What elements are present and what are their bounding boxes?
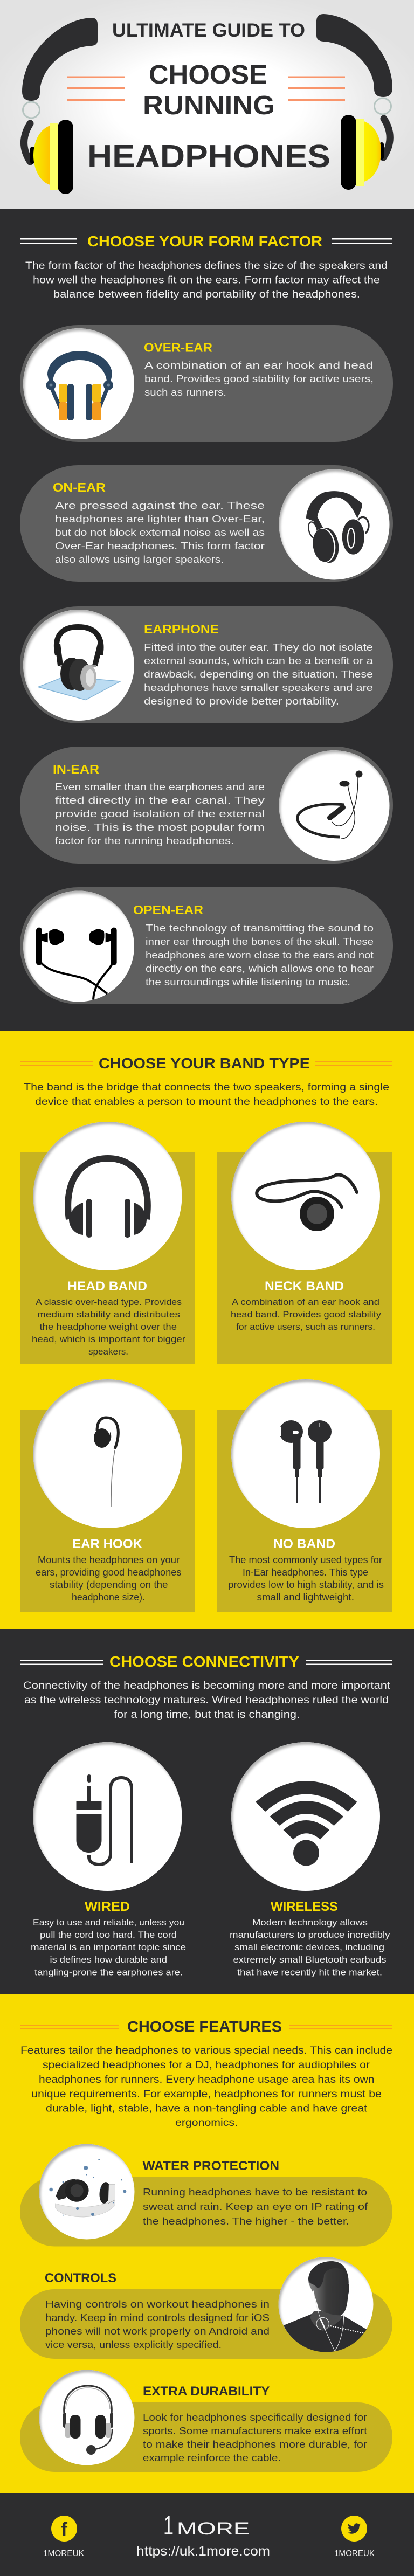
card: ear hook <box>20 1379 195 1612</box>
intro text: band type: device that enables a person to mount the headphones to the ears. <box>35 1096 378 1108</box>
description: in-ear: factor for the running headphones. <box>55 835 234 846</box>
description: water protection: Running headphones have to be resistant to <box>143 2186 367 2198</box>
heading: choose features: CHOOSE FEATURES <box>127 2018 282 2035</box>
label: over-ear: OVER-EAR <box>144 341 212 355</box>
description: on-ear: Are pressed against the ear. These <box>55 500 265 511</box>
description: in-ear <box>55 782 265 846</box>
description: controls: Having controls on workout headphones in <box>45 2298 270 2310</box>
description: open-ear: the surroundings while listening to music. <box>146 977 350 987</box>
facebook handle: 1MOREUK <box>43 2549 84 2558</box>
card: head band <box>20 1122 195 1364</box>
card: wireless <box>230 1742 390 1977</box>
description: extra durability: to make their headphones more durable, for <box>143 2439 367 2450</box>
description: no band: small and lightweight. <box>257 1592 354 1603</box>
heading: choose connectivity: CHOOSE CONNECTIVITY <box>109 1653 299 1670</box>
description: over-ear: A combination of an ear hook and head <box>144 360 373 371</box>
label: no band: NO BAND <box>273 1537 335 1551</box>
description: open-ear <box>146 923 374 987</box>
card: water protection <box>20 2144 392 2247</box>
label: open-ear: OPEN-EAR <box>133 903 203 917</box>
icon: headphones illustration left side <box>22 18 98 194</box>
description: wired: tangling-prone the earphones are. <box>34 1967 183 1977</box>
label: wired: WIRED <box>85 1900 130 1914</box>
intro text: form factor: The form factor of the headphones defines the size of the speakers and <box>25 260 388 272</box>
intro text: form factor <box>25 260 388 300</box>
label: in-ear: IN-EAR <box>53 762 99 776</box>
intro text: connectivity <box>23 1680 391 1721</box>
description: no band <box>228 1555 384 1603</box>
description: earphone: Fitted into the outer ear. They do not isolate <box>144 642 373 653</box>
panel: connectivity section <box>0 1629 414 1994</box>
intro text: features <box>20 2045 392 2129</box>
description: ear hook: ears, providing good headphones <box>36 1567 181 1578</box>
panel: form factor section <box>0 209 414 1031</box>
icon: no band earbuds <box>279 1420 332 1503</box>
description: earphone: headphones have smaller speakers and are <box>144 682 373 693</box>
icon: neck band headset <box>257 1175 357 1231</box>
description: no band: provides low to high stability, and is <box>228 1579 384 1590</box>
description: open-ear: headphones are worn close to the ears and not <box>146 950 374 961</box>
description: ear hook: Mounts the headphones on your <box>38 1555 180 1565</box>
description: water protection: the headphones. The higher - the better. <box>143 2215 349 2227</box>
description: on-ear: also allows using larger speakers. <box>55 554 224 565</box>
description: controls: vice versa, unless explicitly specified. <box>45 2339 222 2350</box>
description: over-ear: band. Provides good stability for active users, <box>144 374 374 384</box>
description: controls: phones will not work properly on Android and <box>45 2325 270 2337</box>
intro text: connectivity: as the wireless technology matures. Wired headphones ruled the world <box>24 1695 389 1706</box>
icon: facebook <box>51 2516 77 2542</box>
icon: twitter <box>341 2516 367 2542</box>
description: in-ear: provide good isolation of the external <box>55 809 265 819</box>
intro text: connectivity: Connectivity of the headphones is becoming more and more important <box>23 1680 391 1691</box>
card: in-ear <box>20 747 393 864</box>
description: wireless: manufacturers to produce incredibly <box>230 1930 390 1940</box>
label: water protection: WATER PROTECTION <box>142 2159 279 2173</box>
description: head band: head, which is important for bigger <box>32 1335 186 1344</box>
title <box>87 20 330 174</box>
logo: 1MORE: MORE <box>177 2519 250 2538</box>
description: no band: The most commonly used types for <box>229 1555 382 1565</box>
description: wired <box>31 1917 186 1977</box>
description: head band: medium stability and distributes <box>37 1310 180 1320</box>
description: over-ear: such as runners. <box>144 387 226 398</box>
description: ear hook: stability (depending on the <box>50 1579 168 1590</box>
description: over-ear <box>144 360 374 398</box>
card: neck band <box>217 1122 392 1364</box>
description: neck band: A combination of an ear hook and <box>232 1297 380 1307</box>
label: on-ear: ON-EAR <box>53 480 106 494</box>
description: head band: speakers. <box>88 1347 128 1357</box>
logo: 1MORE <box>163 2511 250 2540</box>
card: wired <box>31 1742 186 1977</box>
label: head band: HEAD BAND <box>67 1279 147 1294</box>
card: extra durability <box>20 2370 392 2472</box>
icon: over-ear headphones <box>46 351 113 420</box>
card: open-ear <box>20 887 393 1004</box>
description: head band <box>32 1297 186 1357</box>
description: controls: handy. Keep in mind controls designed for iOS <box>45 2312 270 2323</box>
decorative sound lines <box>67 77 345 101</box>
description: earphone: drawback, depending on the situation. These <box>144 669 373 680</box>
intro text: features: durable, light, stable, have a non-tangling cable and have great <box>46 2103 368 2114</box>
card: controls <box>20 2257 392 2359</box>
label: wireless: WIRELESS <box>271 1900 338 1914</box>
twitter handle: 1MOREUK <box>334 2549 375 2558</box>
description: ear hook: headphone size). <box>72 1592 145 1603</box>
logo: 1MORE: 1 <box>163 2511 174 2540</box>
card: no band <box>217 1379 392 1612</box>
description: earphone: external sounds, which can be a benefit or a <box>144 655 374 666</box>
footer <box>0 2493 414 2576</box>
heading: choose your form factor: CHOOSE YOUR FORM FACTOR <box>87 233 322 250</box>
icon: earphone with plate <box>38 627 120 700</box>
description: wireless: small electronic devices, including <box>234 1942 384 1952</box>
title: CHOOSE <box>149 60 267 89</box>
description: in-ear: noise. This is the most popular form <box>55 822 265 833</box>
label: neck band: NECK BAND <box>265 1279 344 1294</box>
description: on-ear: Over-Ear headphones. This form factor <box>55 541 265 551</box>
icon: audio jack <box>77 1774 132 1864</box>
description: extra durability <box>143 2412 367 2463</box>
description: wired: is defines how durable and <box>50 1955 167 1965</box>
description: no band: In-Ear headphones. This type <box>243 1567 368 1578</box>
description: wireless: Modern technology allows <box>252 1917 368 1928</box>
icon: wifi signal <box>256 1781 357 1866</box>
description: in-ear: Even smaller than the earphones and are <box>55 782 265 792</box>
description: extra durability: Look for headphones specifically designed for <box>143 2412 367 2423</box>
intro text: connectivity: for a long time, but that is changing. <box>114 1709 300 1721</box>
intro text: features: unique requirements. For example, headphones for runners must be <box>31 2089 382 2100</box>
description: earphone: designed to provide better portability. <box>144 696 339 707</box>
description: wired: pull the cord too hard. The cord <box>40 1930 177 1940</box>
description: head band: A classic over-head type. Provides <box>36 1297 182 1307</box>
heading: choose your band type: CHOOSE YOUR BAND TYPE <box>99 1055 310 1072</box>
description: in-ear: fitted directly in the ear canal. They <box>55 795 265 806</box>
card: over-ear <box>20 325 393 442</box>
header panel <box>0 0 414 209</box>
intro text: features: ergonomics. <box>175 2117 238 2129</box>
description: on-ear <box>55 500 265 565</box>
intro text: features: Features tailor the headphones to various special needs. This can include <box>20 2045 392 2056</box>
description: neck band: head band. Provides good stability <box>231 1310 382 1320</box>
label: ear hook: EAR HOOK <box>72 1537 143 1551</box>
description: water protection <box>143 2186 368 2227</box>
label: earphone: EARPHONE <box>144 622 219 636</box>
intro text: features: specialized headphones for a DJ, headphones for audiophiles or <box>43 2060 370 2071</box>
description: on-ear: headphones are lighter than Over-Ear, <box>55 514 265 524</box>
icon: headset with microphone <box>63 2386 113 2455</box>
intro text: form factor: how well the headphones fit on the ears. Form factor may affect the <box>33 275 380 286</box>
card: on-ear <box>20 465 393 582</box>
card: earphone <box>20 606 393 723</box>
label: extra durability: EXTRA DURABILITY <box>143 2384 270 2399</box>
icon: in-ear neckband <box>298 771 362 839</box>
description: open-ear: The technology of transmitting the sound to <box>146 923 374 934</box>
description: water protection: sweat and rain. Keep an eye on IP rating of <box>143 2201 368 2212</box>
intro text: form factor: balance between fidelity and portability of the headphones. <box>53 289 360 300</box>
description: controls <box>45 2298 270 2350</box>
description: extra durability: example reinforce the cable. <box>143 2452 281 2463</box>
intro text: band type <box>24 1082 389 1108</box>
description: wireless: extremely small Bluetooth earbuds <box>233 1955 386 1965</box>
description: head band: the headphone weight over the <box>40 1322 177 1332</box>
label: controls: CONTROLS <box>45 2271 116 2285</box>
intro text: band type: The band is the bridge that connects the two speakers, forming a single <box>24 1082 389 1093</box>
icon: facebook: f <box>61 2518 68 2540</box>
description: open-ear: inner ear through the bones of the skull. These <box>146 936 374 947</box>
description: wired: material is an important topic since <box>31 1942 186 1952</box>
title: ULTIMATE GUIDE TO <box>112 20 305 41</box>
description: wireless <box>230 1917 390 1977</box>
icon: runner silhouette with earphones <box>282 2261 371 2354</box>
description: on-ear: but do not block external noise as well as <box>55 527 265 538</box>
description: neck band: for active users, such as runners. <box>236 1322 375 1332</box>
description: earphone <box>144 642 374 707</box>
icon: on-ear headphones <box>306 491 370 564</box>
panel: features section <box>0 1994 414 2493</box>
icon: ear hook earbud <box>94 1418 118 1507</box>
website url: https://uk.1more.com <box>136 2544 270 2559</box>
icon: headphones illustration right side <box>316 14 392 190</box>
icon: open-ear earbuds <box>36 928 117 1000</box>
description: wired: Easy to use and reliable, unless you <box>33 1917 184 1928</box>
panel: band type section <box>0 1031 414 1629</box>
icon: head band headphones <box>68 1158 148 1238</box>
title: RUNNING <box>143 91 275 120</box>
intro text: features: headphones for runners. Every headphone usage area has its own <box>39 2074 374 2085</box>
icon: water-splashed headphones <box>49 2159 126 2217</box>
description: ear hook <box>36 1555 181 1603</box>
description: neck band <box>231 1297 382 1332</box>
title: HEADPHONES <box>87 139 330 174</box>
description: extra durability: sports. Some manufacturers make extra effort <box>143 2425 367 2436</box>
description: open-ear: directly on the ears, which allows one to hear <box>146 963 374 974</box>
description: wireless: that have recently hit the market. <box>237 1967 382 1977</box>
